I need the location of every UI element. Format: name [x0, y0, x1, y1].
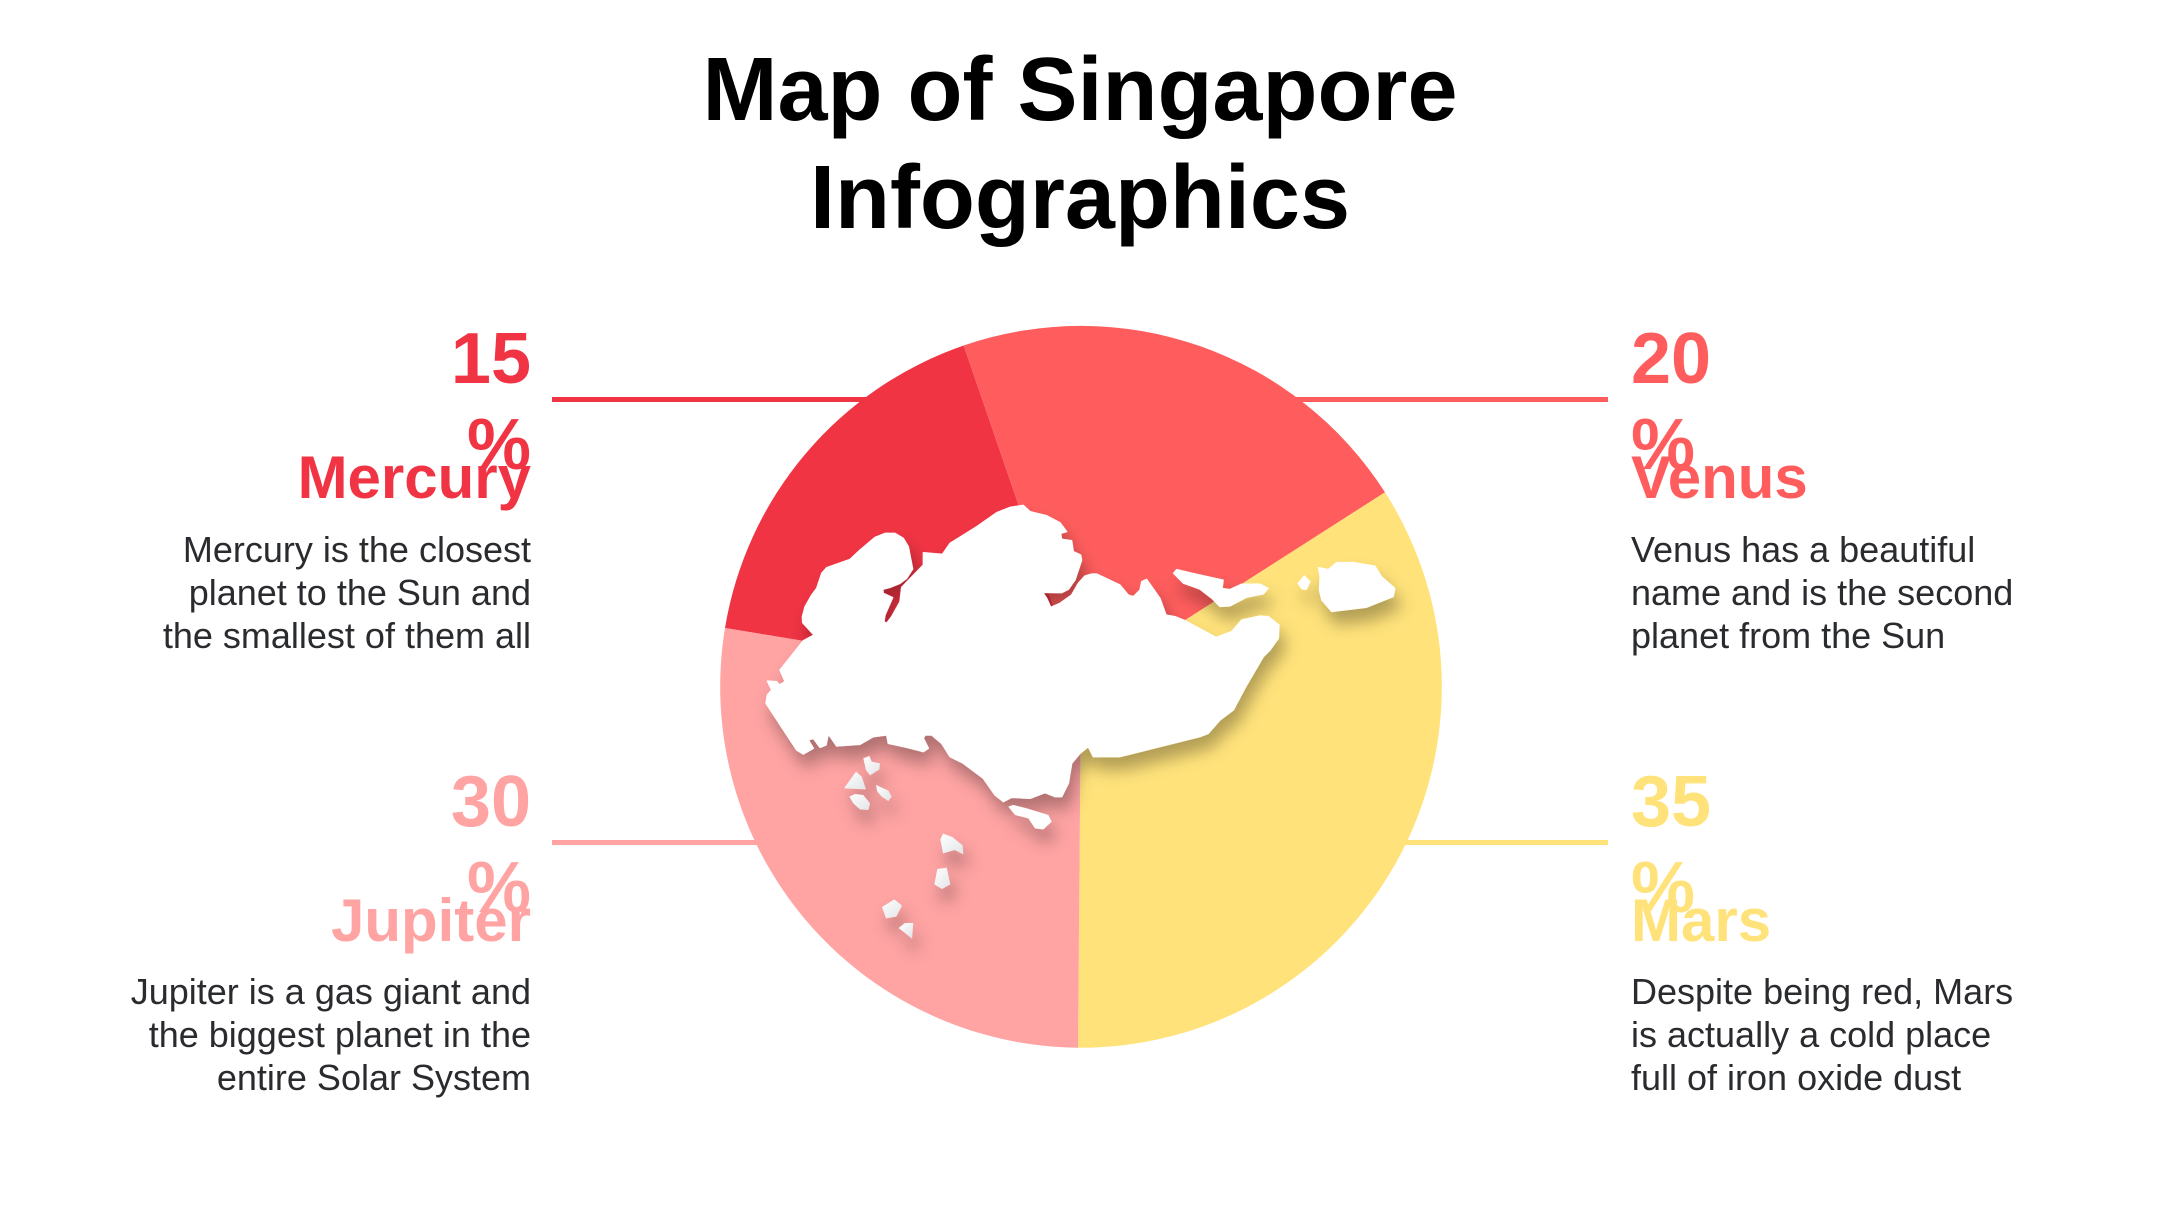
title: Map of Singapore	[702, 40, 1458, 140]
Venus description	[1631, 529, 2013, 656]
Venus percentage: 20	[1631, 319, 1711, 399]
Pulau Tekong	[1318, 562, 1395, 612]
Venus description: name and is the second	[1631, 572, 2013, 613]
Jupiter description: the biggest planet in the	[149, 1014, 531, 1055]
Mercury description	[163, 529, 531, 656]
pie slice: Venus	[964, 326, 1385, 687]
Venus description: planet from the Sun	[1631, 615, 1945, 656]
Sentosa	[1008, 805, 1052, 829]
Mercury description: the smallest of them all	[163, 615, 531, 656]
Mars description: Despite being red, Mars	[1631, 971, 2013, 1012]
Mars percentage	[1631, 762, 1711, 928]
pie slice: Mars	[1078, 492, 1442, 1048]
connector line: Jupiter	[552, 840, 852, 844]
Venus heading: Venus	[1631, 444, 1808, 511]
Mars description	[1631, 971, 2013, 1098]
connector line: Mars	[1300, 840, 1608, 844]
pie slice: Jupiter	[720, 628, 1081, 1048]
main island	[766, 505, 1279, 802]
Jupiter heading: Jupiter	[331, 887, 531, 954]
Jupiter description	[131, 971, 531, 1098]
Venus percentage	[1631, 319, 1711, 485]
Mercury percentage	[451, 319, 531, 485]
Mars description: is actually a cold place	[1631, 1014, 1991, 1055]
Pulau Ubin	[1173, 569, 1268, 607]
pie slice: Mercury	[725, 346, 1081, 687]
southern islands	[844, 756, 963, 939]
Mars heading: Mars	[1631, 887, 1771, 954]
Venus percentage: %	[1631, 405, 1695, 485]
title: Infographics	[810, 148, 1350, 248]
Jupiter percentage: %	[467, 848, 531, 928]
Jupiter percentage	[451, 762, 531, 928]
Jupiter percentage: 30	[451, 762, 531, 842]
title	[702, 40, 1458, 248]
Mars description: full of iron oxide dust	[1631, 1057, 1961, 1098]
Mars percentage: %	[1631, 848, 1695, 928]
connector line: Venus	[1250, 397, 1608, 402]
Mercury description: Mercury is the closest	[183, 529, 531, 570]
Jupiter description: entire Solar System	[217, 1057, 531, 1098]
Mercury heading: Mercury	[298, 444, 531, 511]
Mars percentage: 35	[1631, 762, 1711, 842]
map of Singapore	[766, 505, 1395, 939]
small eastern island	[1297, 575, 1311, 590]
Mercury description: planet to the Sun and	[189, 572, 531, 613]
Venus description: Venus has a beautiful	[1631, 529, 1975, 570]
Mercury percentage: %	[467, 405, 531, 485]
Mercury percentage: 15	[451, 319, 531, 399]
Jupiter description: Jupiter is a gas giant and	[131, 971, 531, 1012]
connector line: Mercury	[552, 397, 952, 402]
